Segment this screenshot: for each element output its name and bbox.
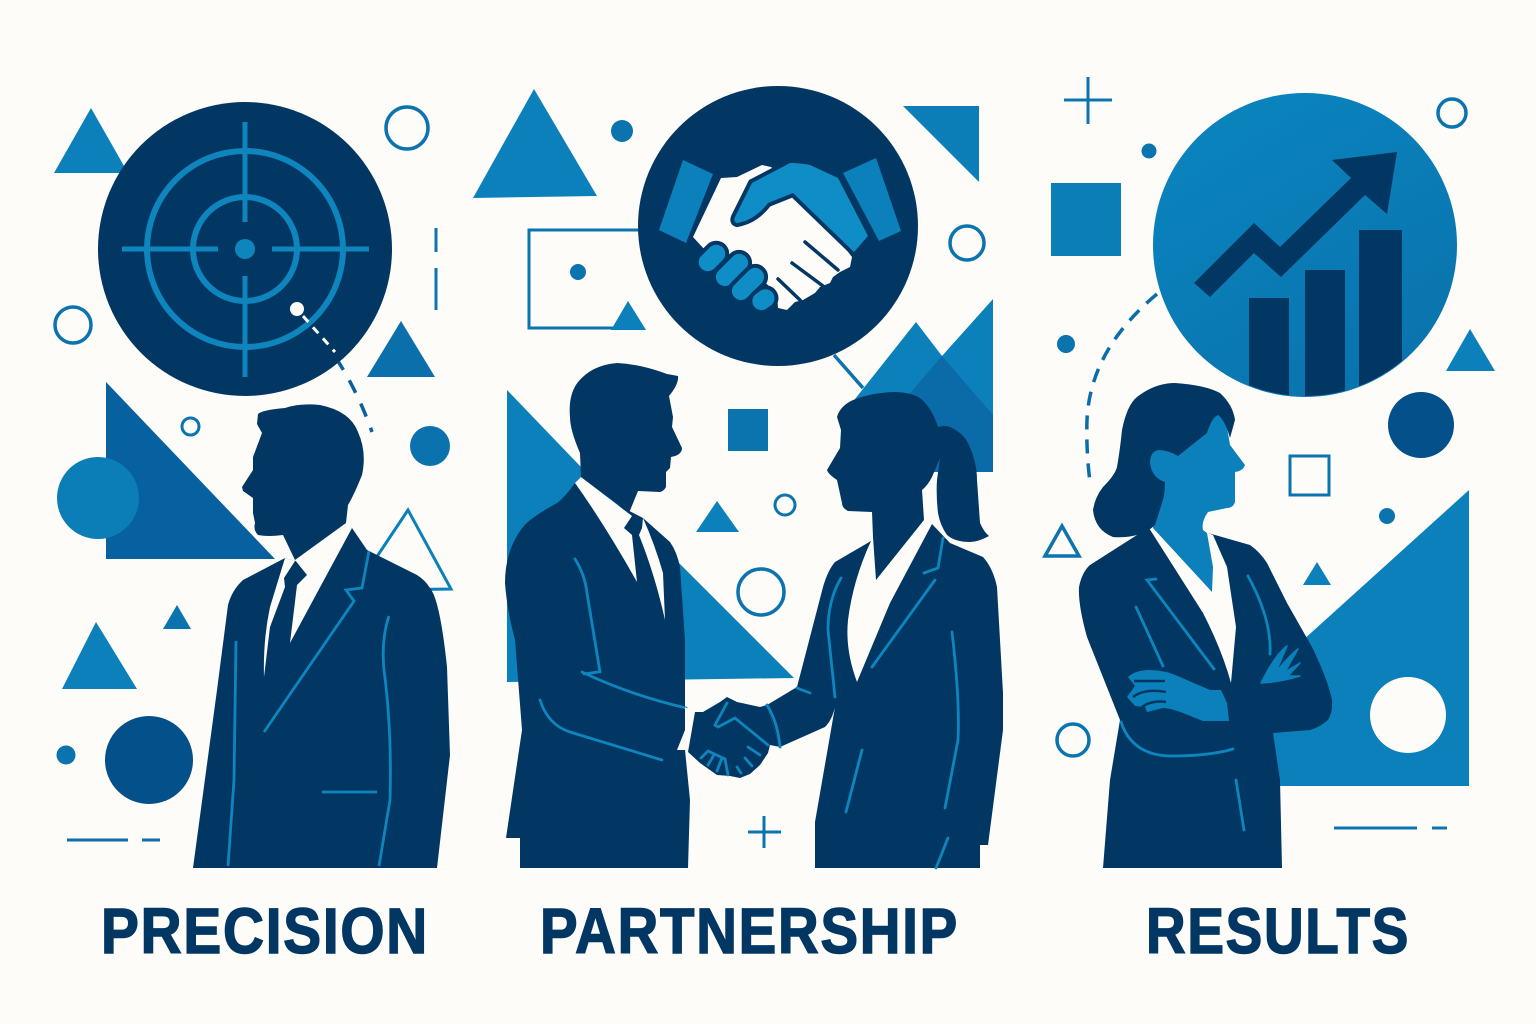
decorative shapes: results (1045, 77, 1495, 828)
panel: results (1045, 77, 1495, 967)
icon: handshake (638, 86, 918, 366)
label: partnership: PARTNERSHIP (540, 895, 959, 967)
icon: growth chart (1153, 93, 1457, 410)
panel: partnership (473, 86, 1003, 967)
icon: clasped hands (677, 697, 780, 778)
figure: man facing right (505, 363, 690, 868)
label: precision: PRECISION (101, 895, 429, 967)
decorative shapes: partnership (473, 89, 993, 848)
panel: precision (54, 102, 451, 967)
figure: woman facing left (677, 392, 1003, 868)
label: results: RESULTS (1146, 895, 1410, 967)
icon: right hand (1261, 646, 1300, 683)
figure: woman with crossed arms (1079, 383, 1332, 868)
icon: left hand (1127, 670, 1229, 721)
figure: man in profile (193, 404, 450, 868)
decorative shapes: precision (54, 107, 451, 840)
icon: target (98, 102, 392, 396)
